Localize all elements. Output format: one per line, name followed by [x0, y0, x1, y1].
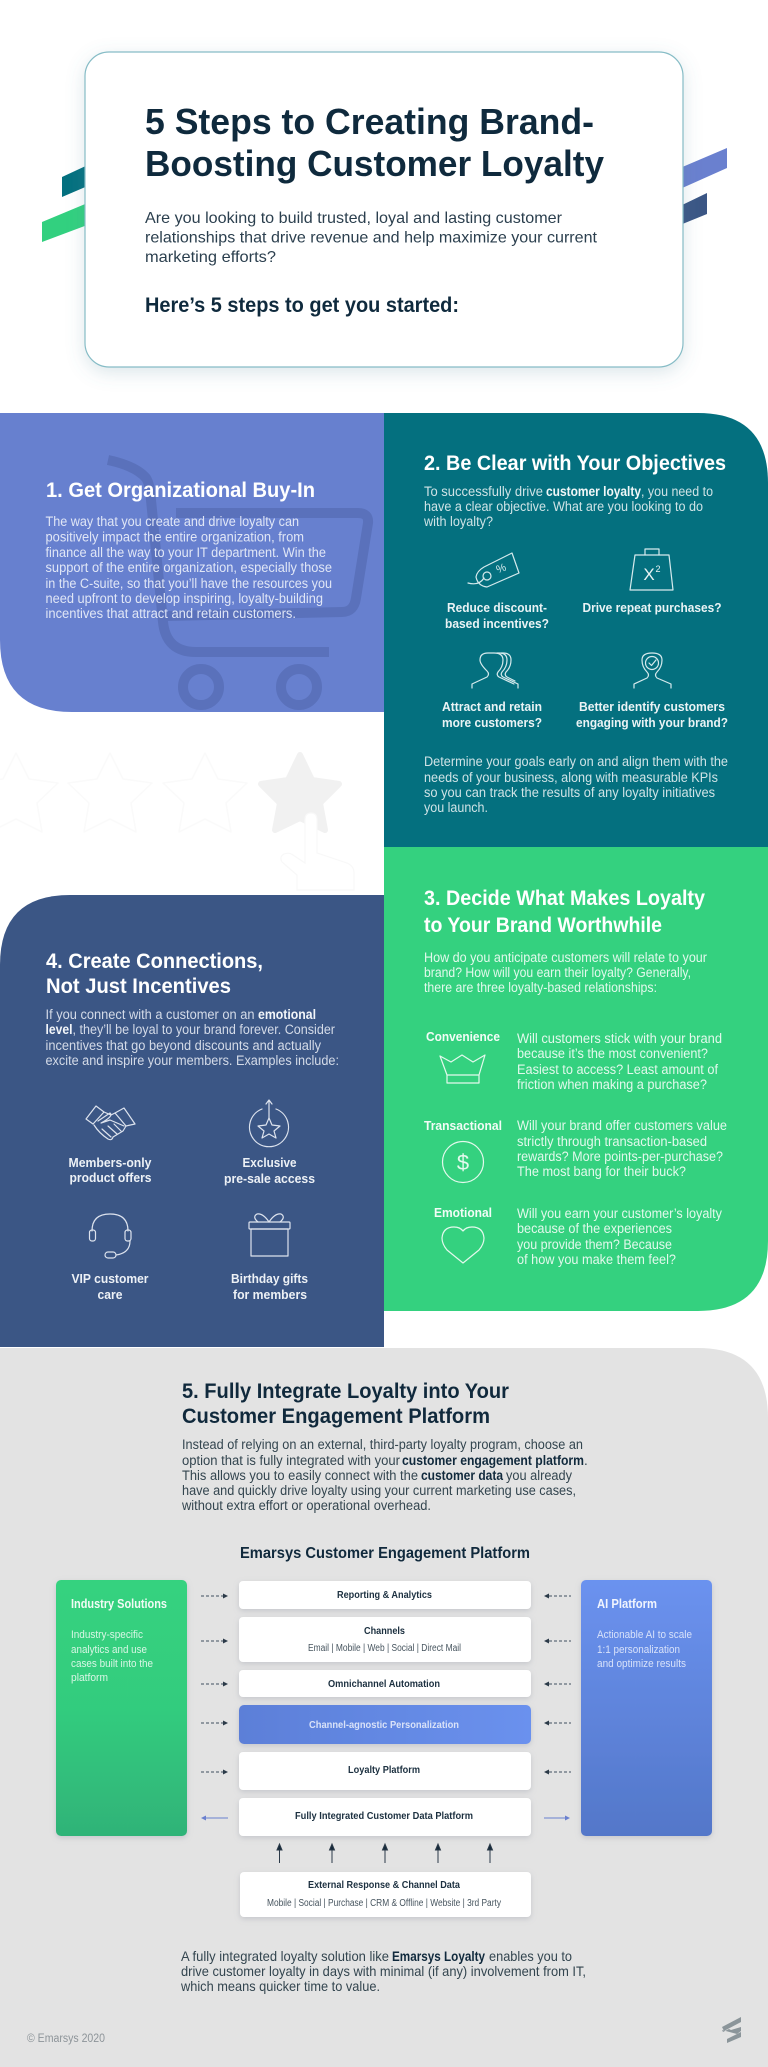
body text: incentives that go beyond discounts and actually — [46, 1038, 321, 1053]
box: channels — [239, 1617, 531, 1662]
label: reduce discount: based incentives? — [445, 616, 549, 631]
closing text: drive customer loyalty in days with minimal (if any) involvement from IT, — [181, 1964, 586, 1979]
closing text: needs of your business, along with measurable KPIs — [424, 770, 718, 785]
box: personalization: Channel-agnostic Personalization — [309, 1719, 459, 1731]
box: loyalty platform — [239, 1752, 531, 1790]
body text — [424, 950, 707, 995]
box: reporting — [239, 1581, 531, 1609]
heading: Customer Engagement Platform — [182, 1405, 490, 1428]
body text — [46, 514, 332, 621]
label: attract and retain — [442, 699, 542, 730]
icon: dollar coin: $ — [457, 1150, 469, 1175]
intro text: relationships that drive revenue and help maximize your current — [145, 230, 598, 246]
heading: 3. Decide What Makes Loyalty — [424, 886, 705, 910]
body text: To successfully drive — [424, 484, 543, 499]
label: reduce discount: Reduce discount- — [447, 600, 547, 615]
decorative stripes right — [680, 148, 727, 225]
body text: incentives that attract and retain customers. — [46, 606, 296, 621]
icon: crown — [440, 1055, 485, 1083]
icon: star with circular arrow — [250, 1100, 288, 1147]
body text: have and quickly drive loyalty using your current marketing use cases, — [182, 1483, 576, 1498]
text: transactional: Will your brand offer customers value — [517, 1118, 727, 1133]
text: emotional — [517, 1206, 722, 1267]
intro text: Are you looking to build trusted, loyal and lasting customer — [145, 210, 563, 227]
panel: industry solutions: Industry Solutions — [71, 1597, 167, 1611]
title: 5 Steps to Creating Brand- — [145, 101, 594, 142]
body text: , they’ll be loyal to your brand forever. Consider — [72, 1022, 335, 1037]
body text: in the C-suite, so that you’ll have the resources you — [46, 576, 332, 591]
panel: industry solutions — [56, 1580, 187, 1836]
label: birthday gifts: Birthday gifts — [231, 1271, 308, 1286]
decorative stars with pointer — [0, 753, 354, 890]
icon: discount tag: % — [495, 562, 508, 576]
box: omnichannel automation: Omnichannel Automation — [328, 1678, 440, 1690]
closing text: so you can track the results of any loyalty initiatives — [424, 785, 715, 800]
box: external data: External Response & Channel Data — [308, 1879, 460, 1891]
heading: to Your Brand Worthwhile — [424, 913, 662, 937]
heading: 4. Create Connections, — [46, 949, 263, 973]
icon: heart — [442, 1227, 484, 1263]
panel: AI platform: 1:1 personalization — [597, 1644, 680, 1656]
label: members-only: Members-only — [68, 1155, 152, 1170]
body text: This allows you to easily connect with the — [182, 1468, 418, 1483]
body text: emotional — [258, 1007, 316, 1022]
body text: without extra effort or operational overhead. — [181, 1498, 431, 1513]
text: transactional: rewards? More points-per-purchase? — [517, 1149, 723, 1164]
diagram heading: Emarsys Customer Engagement Platform — [240, 1545, 530, 1562]
body text: option that is fully integrated with your — [182, 1453, 401, 1468]
label: birthday gifts — [231, 1271, 308, 1302]
closing text: Determine your goals early on and align them with the — [424, 754, 728, 769]
label: exclusive: pre-sale access — [224, 1171, 315, 1186]
body text: excite and inspire your members. Examples include: — [46, 1053, 339, 1068]
body text: customer data — [421, 1468, 503, 1483]
body text: positively impact the entire organization, from — [46, 530, 304, 544]
body text — [423, 484, 713, 529]
body text: brand? How will you earn their loyalty? Generally, — [424, 965, 691, 980]
panel: step 1 — [0, 413, 384, 712]
panel: step 2 — [384, 413, 768, 847]
box: loyalty platform: Loyalty Platform — [348, 1764, 420, 1776]
text: emotional: Will you earn your customer’s loyalty — [517, 1206, 722, 1221]
heading — [46, 949, 263, 998]
body text: there are three loyalty-based relationships: — [424, 980, 657, 995]
label: attract and retain: more customers? — [442, 715, 542, 730]
text: transactional: strictly through transaction-based — [517, 1134, 707, 1149]
heading — [424, 886, 705, 937]
heading: 2. Be Clear with Your Objectives — [424, 451, 726, 475]
label: members-only: product offers — [70, 1170, 152, 1185]
label: VIP care: VIP customer — [72, 1271, 148, 1286]
body text — [181, 1437, 588, 1513]
arrows: upward — [277, 1844, 492, 1863]
label: birthday gifts: for members — [233, 1287, 307, 1302]
box: channels: Email | Mobile | Web | Social | Direct Mail — [308, 1643, 461, 1654]
box: customer data platform — [239, 1798, 531, 1836]
label: drive repeat purchases: Drive repeat purchases? — [582, 600, 722, 615]
icon: people — [472, 653, 518, 688]
box: reporting: Reporting & Analytics — [337, 1589, 432, 1601]
panel: step 5 — [0, 1348, 768, 2067]
heading: 1. Get Organizational Buy-In — [46, 478, 315, 502]
label: transactional: Transactional — [424, 1118, 502, 1133]
text: transactional — [517, 1118, 727, 1179]
text: convenience — [517, 1031, 722, 1092]
label: exclusive: Exclusive — [242, 1155, 296, 1170]
decorative stripes left — [42, 164, 90, 242]
closing text: you launch. — [424, 800, 488, 815]
text: convenience: Easiest to access? Least amount of — [517, 1062, 718, 1077]
closing text: Emarsys Loyalty — [392, 1949, 485, 1964]
label: VIP care: care — [98, 1287, 122, 1302]
label: members-only — [68, 1155, 152, 1185]
icon: shopping bag squared: X — [643, 565, 655, 584]
panel: AI platform: Actionable AI to scale — [597, 1629, 692, 1641]
panel: step 3 — [384, 847, 768, 1311]
label: reduce discount — [445, 600, 549, 631]
body text: have a clear objective. What are you looking to do — [424, 499, 703, 514]
text: emotional: you provide them? Because — [517, 1237, 672, 1252]
title — [145, 101, 604, 184]
label: convenience: Convenience — [426, 1029, 500, 1044]
label: attract and retain: Attract and retain — [442, 699, 542, 714]
panel: industry solutions: platform — [71, 1672, 108, 1684]
intro text: marketing efforts? — [145, 249, 276, 266]
box: channels: Channels — [364, 1625, 405, 1637]
body text: with loyalty? — [423, 514, 493, 529]
label: exclusive — [224, 1155, 315, 1186]
label: emotional: Emotional — [434, 1205, 492, 1220]
text: convenience: because it’s the most convenient? — [517, 1046, 708, 1061]
copyright: © Emarsys 2020 — [27, 2033, 105, 2045]
body text: If you connect with a customer on an — [46, 1007, 254, 1022]
intro card — [85, 52, 683, 367]
body text: The way that you create and drive loyalty can — [46, 514, 299, 529]
box: omnichannel automation — [239, 1670, 531, 1697]
label: better identify: Better identify customers — [579, 699, 725, 714]
arrows: right side — [544, 1594, 571, 1820]
body text: support of the entire organization, especially those — [46, 560, 332, 575]
label: better identify — [576, 699, 728, 730]
text: emotional: of how you make them feel? — [517, 1252, 676, 1267]
text: emotional: because of the experiences — [517, 1221, 672, 1236]
title: Boosting Customer Loyalty — [145, 143, 604, 184]
subheading: Here’s 5 steps to get you started: — [145, 294, 459, 317]
text: convenience: friction when making a purchase? — [517, 1077, 707, 1092]
box: customer data platform: Fully Integrated Customer Data Platform — [295, 1810, 473, 1822]
box: external data: Mobile | Social | Purchase | CRM & Offline | Website | 3rd Party — [267, 1898, 501, 1909]
icon: shopping bag squared: 2 — [655, 564, 661, 574]
heading — [182, 1380, 509, 1428]
body text: . — [584, 1453, 588, 1468]
icon: Emarsys logo — [722, 2017, 741, 2043]
body text: , you need to — [641, 484, 713, 499]
body text: How do you anticipate customers will relate to your — [424, 950, 707, 965]
text: transactional: The most bang for their buck? — [517, 1164, 686, 1179]
box: personalization — [239, 1705, 531, 1744]
icon: headset — [90, 1214, 131, 1258]
body text — [46, 1007, 339, 1068]
arrows: left side — [201, 1594, 228, 1820]
body text: Instead of relying on an external, third-party loyalty program, choose an — [182, 1437, 583, 1452]
body text: finance all the way to your IT department. Win the — [46, 545, 326, 560]
icon: gift — [249, 1214, 290, 1256]
panel: industry solutions: analytics and use — [71, 1644, 147, 1656]
closing text — [180, 1949, 586, 1994]
heading: 5. Fully Integrate Loyalty into Your — [182, 1380, 509, 1403]
text: convenience: Will customers stick with your brand — [517, 1031, 722, 1046]
label: VIP care — [72, 1271, 148, 1302]
closing text: A fully integrated loyalty solution like — [181, 1949, 389, 1964]
body text: you already — [506, 1468, 572, 1483]
panel: AI platform — [581, 1580, 712, 1836]
panel: step 4 — [0, 895, 384, 1347]
panel: industry solutions: cases built into the — [71, 1658, 153, 1670]
panel: AI platform: and optimize results — [597, 1658, 686, 1670]
icon: shopping bag squared — [630, 549, 673, 590]
icon: shopping cart — [108, 460, 368, 705]
body text: need upfront to develop inspiring, loyalty-building — [46, 591, 323, 606]
closing text: which means quicker time to value. — [180, 1979, 380, 1994]
label: better identify: engaging with your brand? — [576, 715, 728, 730]
body text: customer loyalty — [546, 484, 641, 499]
icon: identified person — [634, 653, 671, 688]
intro text — [145, 210, 598, 266]
body text: level — [46, 1022, 72, 1037]
icon: handshake — [86, 1106, 135, 1140]
closing text: enables you to — [489, 1949, 572, 1964]
icon: dollar coin — [442, 1142, 484, 1182]
panel: industry solutions: Industry-specific — [71, 1629, 143, 1641]
closing text — [424, 754, 728, 815]
icon: discount tag — [468, 553, 519, 587]
body text: customer engagement platform — [402, 1453, 584, 1468]
panel: AI platform: AI Platform — [597, 1597, 657, 1611]
heading: Not Just Incentives — [46, 974, 231, 998]
box: external data — [240, 1872, 531, 1917]
